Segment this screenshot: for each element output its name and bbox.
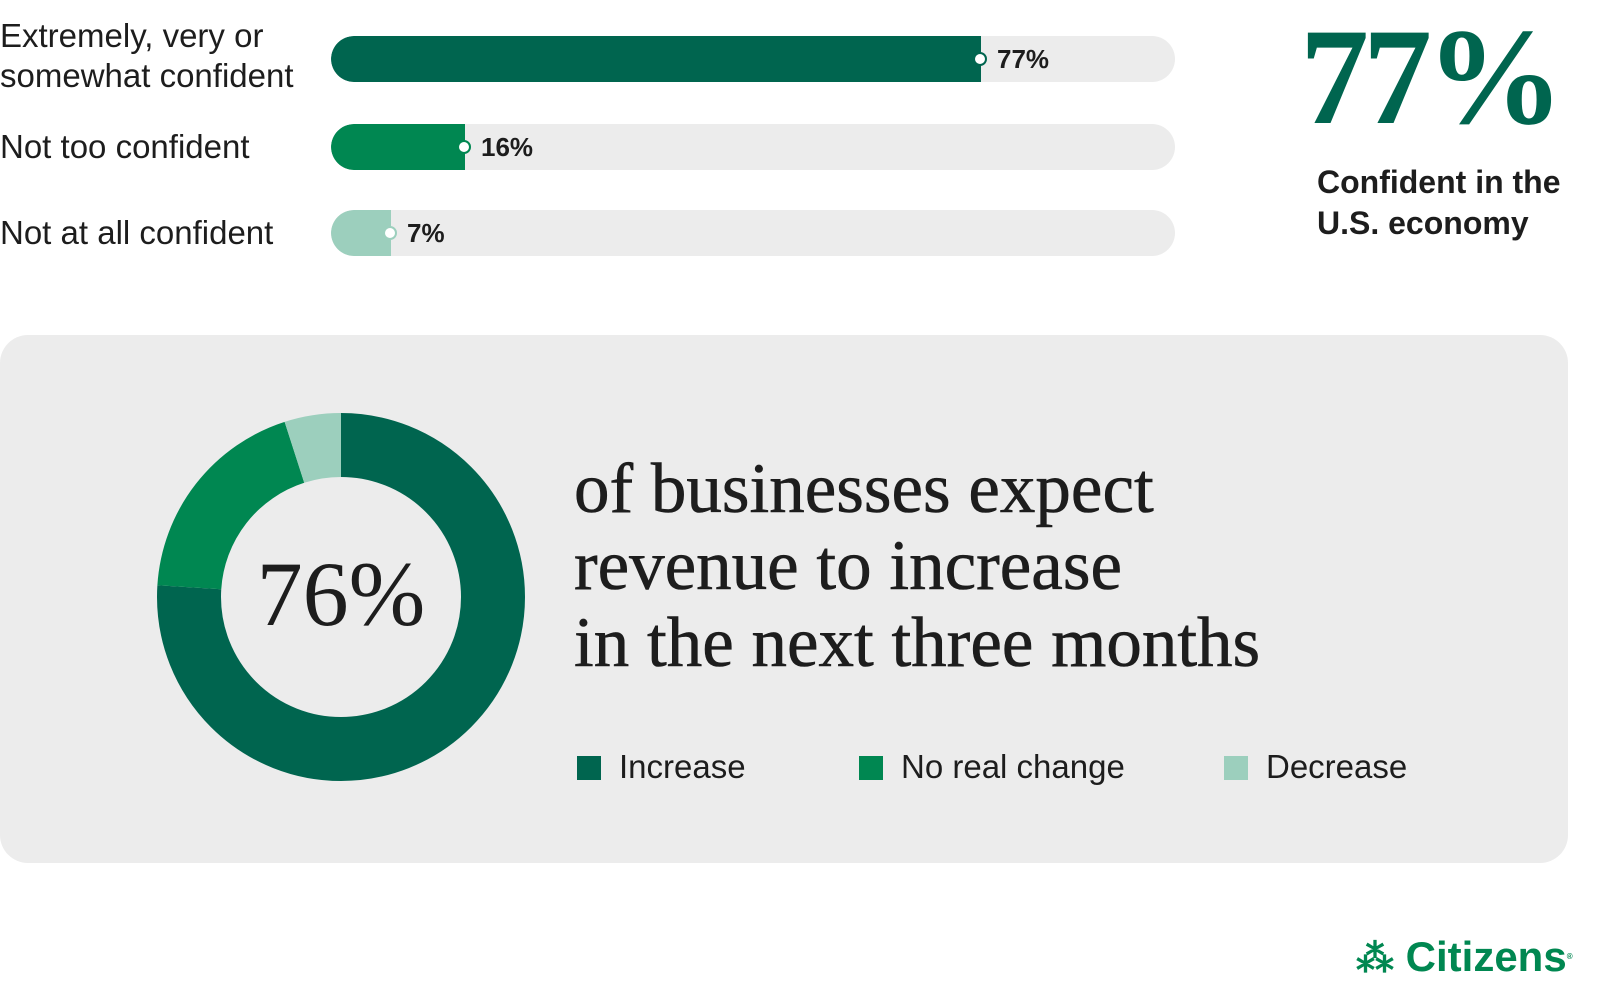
bar: 16%: 16%	[481, 132, 533, 162]
legend: increase: Increase	[619, 748, 746, 785]
donut chart	[157, 413, 525, 781]
headline: of businesses expect	[574, 450, 1154, 528]
stat caption: U.S. economy	[1317, 205, 1529, 241]
bar: 7%	[331, 210, 1175, 256]
label: not too confident: Not too confident	[0, 128, 250, 165]
bar: 77%	[331, 36, 1175, 82]
headline	[574, 450, 1260, 682]
label: not at all confident: Not at all confident	[0, 214, 273, 251]
donut chart: 76%	[257, 543, 425, 645]
stat caption: Confident in the	[1317, 164, 1561, 200]
legend: no real change: No real change	[901, 748, 1125, 785]
legend: decrease: Decrease	[1266, 748, 1407, 785]
headline: revenue to increase	[574, 527, 1122, 605]
panel: revenue expectations	[0, 335, 1568, 863]
headline: in the next three months	[574, 604, 1260, 682]
logo: Citizens: ⁂ Citizens®	[1356, 933, 1573, 980]
bar: 16%	[331, 124, 1175, 170]
label: extremely confident: somewhat confident	[0, 57, 294, 94]
big stat 77%: 77%	[1300, 0, 1558, 153]
label: extremely confident: Extremely, very or	[0, 17, 263, 54]
stat caption	[1317, 164, 1561, 241]
bar: 77%: 77%	[997, 44, 1049, 74]
label: extremely confident	[0, 17, 294, 94]
bar: 7%: 7%	[407, 218, 445, 248]
